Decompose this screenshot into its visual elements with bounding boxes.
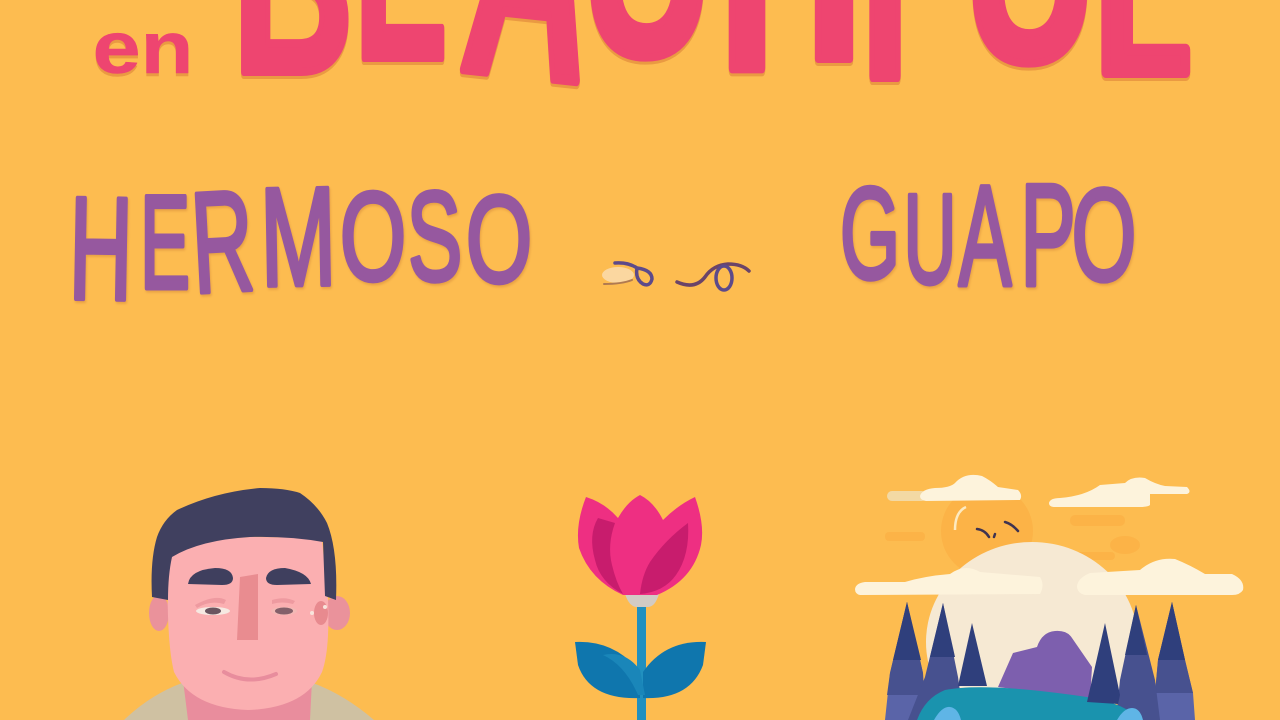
word: GUAPO: O: [1072, 163, 1136, 309]
tree 2: [908, 603, 964, 720]
leaves: [575, 642, 640, 698]
eyes: [195, 598, 297, 615]
word: HERMOSO: E: [140, 167, 190, 316]
word: HERMOSO: H: [68, 166, 134, 331]
illustration: landscape: [855, 475, 1243, 720]
ears: [149, 595, 350, 631]
trees: [885, 602, 1195, 720]
hazy streaks: [885, 515, 1140, 560]
illustration: tulip: [575, 495, 706, 720]
clouds: [855, 475, 1243, 595]
calyx: [625, 594, 659, 607]
sun: [941, 485, 1033, 577]
face: [168, 537, 328, 710]
word: HERMOSO: R: [188, 161, 257, 323]
tree 1: [885, 602, 925, 720]
moon: [926, 542, 1138, 720]
word: GUAPO: P: [1020, 155, 1076, 317]
word: HERMOSO: O: [340, 167, 406, 307]
stem: [637, 605, 646, 720]
mountain: [998, 631, 1092, 700]
illustration: man portrait: [124, 488, 374, 720]
sun highlight: [955, 507, 966, 530]
cheek mark: [310, 601, 328, 625]
word: GUAPO: U: [904, 168, 956, 310]
icon: squiggle connector: [602, 263, 749, 290]
word: GUAPO: [840, 155, 1136, 317]
word: HERMOSO: [68, 159, 532, 331]
hill: [917, 687, 1140, 720]
nose: [237, 574, 258, 640]
hair: [152, 488, 336, 600]
shoulders: [124, 683, 374, 720]
petals: [578, 495, 702, 595]
title word: en: en: [93, 6, 193, 89]
title: [93, 0, 1190, 161]
birds: [977, 522, 1018, 537]
neck: [183, 680, 312, 720]
word: HERMOSO: M: [259, 159, 337, 316]
eyebrows: [188, 568, 311, 585]
word: HERMOSO: O: [466, 171, 532, 309]
tree 6: [1150, 602, 1195, 720]
title word: BEAUTIFUL: [232, 0, 1190, 161]
mouth: [224, 672, 276, 680]
tree 3: [958, 623, 987, 686]
word: GUAPO: A: [959, 156, 1011, 316]
word: GUAPO: G: [840, 160, 900, 306]
word: HERMOSO: S: [405, 165, 464, 308]
tree 5: [1116, 605, 1160, 720]
front tree: [1087, 623, 1120, 704]
hill highlights: [934, 707, 1143, 720]
